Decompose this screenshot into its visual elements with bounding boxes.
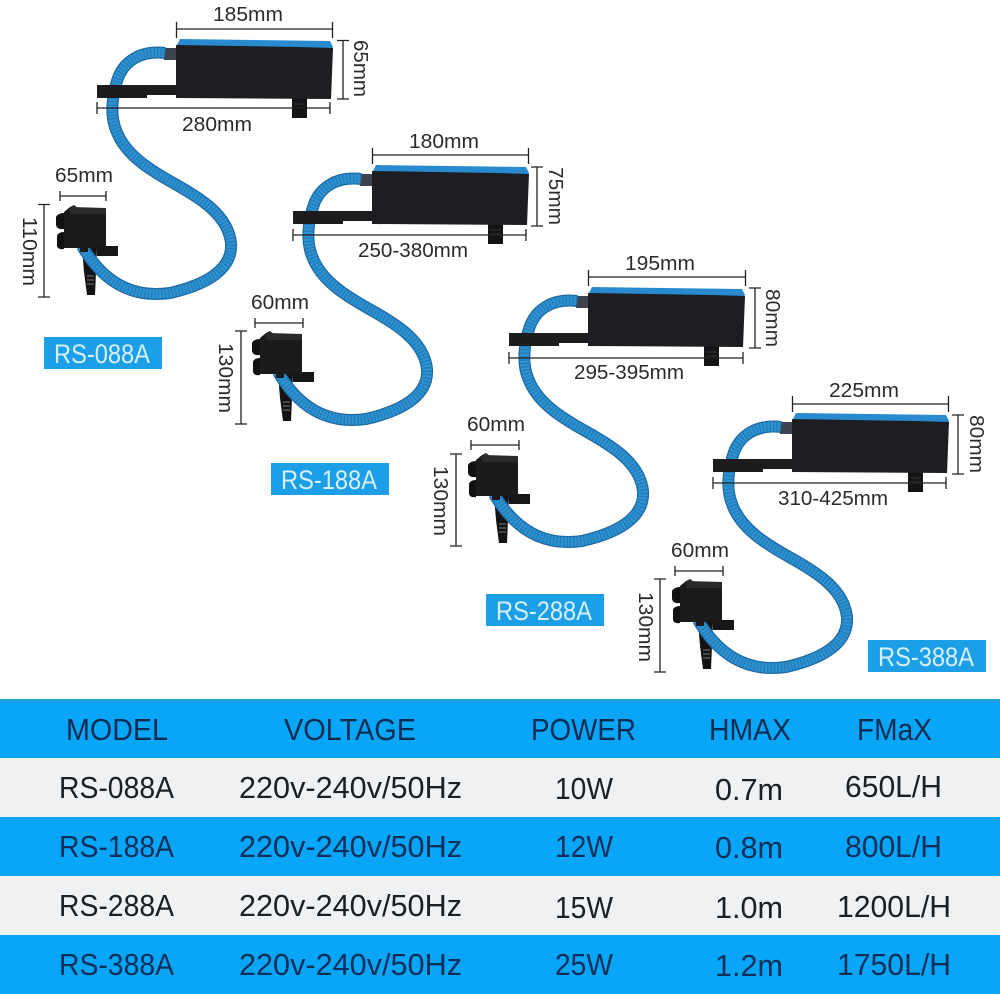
height label: 75mm: [544, 167, 567, 225]
filter box, hose and pump photo: [252, 165, 529, 421]
pump height label: 130mm: [634, 592, 657, 662]
width label: 225mm: [829, 379, 899, 402]
row: RS-088A: [0, 758, 1000, 817]
dimension lines: [38, 22, 349, 297]
filter box, hose and pump photo: [56, 39, 333, 295]
row: RS-288A: [0, 876, 1000, 935]
dimension lines: [450, 270, 761, 546]
length label: 250-380mm: [358, 239, 468, 262]
height label: 80mm: [965, 415, 988, 473]
row: RS-088A: 220v-240v/50Hz: [239, 770, 462, 805]
row: RS-388A: [0, 935, 1000, 994]
product set: RS-188A: [214, 130, 567, 495]
product set: RS-088A: [18, 3, 372, 369]
table header row: MODEL: [66, 712, 168, 747]
row: RS-288A: 220v-240v/50Hz: [239, 888, 462, 923]
row: RS-188A: 0.8m: [715, 830, 783, 865]
row: RS-188A: RS-188A: [59, 829, 174, 864]
model tag: RS-388A: [878, 642, 974, 672]
pump height label: 110mm: [18, 217, 41, 286]
row: RS-188A: 12W: [555, 829, 614, 864]
row: RS-088A: 10W: [555, 771, 614, 806]
filter box, hose and pump photo: [468, 287, 745, 543]
height label: 65mm: [349, 40, 372, 97]
pump width label: 60mm: [671, 539, 729, 562]
width label: 185mm: [213, 3, 283, 26]
row: RS-388A: 25W: [555, 947, 614, 982]
row: RS-388A: RS-388A: [59, 947, 174, 982]
length label: 295-395mm: [574, 361, 684, 384]
row: RS-388A: 1750L/H: [837, 947, 951, 982]
pump width label: 60mm: [251, 291, 309, 314]
row: RS-088A: RS-088A: [59, 770, 174, 805]
width label: 180mm: [409, 130, 479, 153]
row: RS-188A: 220v-240v/50Hz: [239, 829, 462, 864]
model tag: RS-288A: [496, 596, 592, 626]
pump width label: 65mm: [55, 164, 113, 187]
table header row: FMaX: [857, 712, 932, 747]
pump width label: 60mm: [467, 413, 525, 436]
row: RS-088A: 0.7m: [715, 772, 783, 807]
row: RS-188A: [0, 817, 1000, 876]
width label: 195mm: [625, 252, 695, 275]
row: RS-388A: 220v-240v/50Hz: [239, 947, 462, 982]
specification table: [0, 699, 1000, 994]
row: RS-288A: 1200L/H: [837, 889, 951, 924]
product set: RS-388A: [634, 379, 988, 672]
model tag: RS-188A: [281, 465, 377, 495]
row: RS-288A: 15W: [555, 890, 614, 925]
filter box, hose and pump photo: [672, 413, 949, 669]
dimension lines: [654, 396, 964, 672]
pump height label: 130mm: [214, 343, 237, 413]
length label: 310-425mm: [778, 487, 888, 510]
dimension lines: [235, 148, 543, 424]
row: RS-088A: 650L/H: [845, 769, 942, 804]
row: RS-188A: 800L/H: [845, 829, 942, 864]
height label: 80mm: [761, 289, 784, 347]
table header row: HMAX: [709, 712, 791, 747]
pump height label: 130mm: [429, 466, 452, 536]
row: RS-288A: 1.0m: [715, 890, 783, 925]
product set: RS-288A: [429, 252, 784, 626]
table header row: VOLTAGE: [284, 712, 416, 747]
row: RS-288A: RS-288A: [59, 888, 174, 923]
model tag: RS-088A: [54, 339, 150, 369]
row: RS-388A: 1.2m: [715, 948, 783, 983]
table header row: POWER: [531, 712, 636, 747]
table header row: [0, 699, 1000, 758]
length label: 280mm: [182, 113, 252, 136]
